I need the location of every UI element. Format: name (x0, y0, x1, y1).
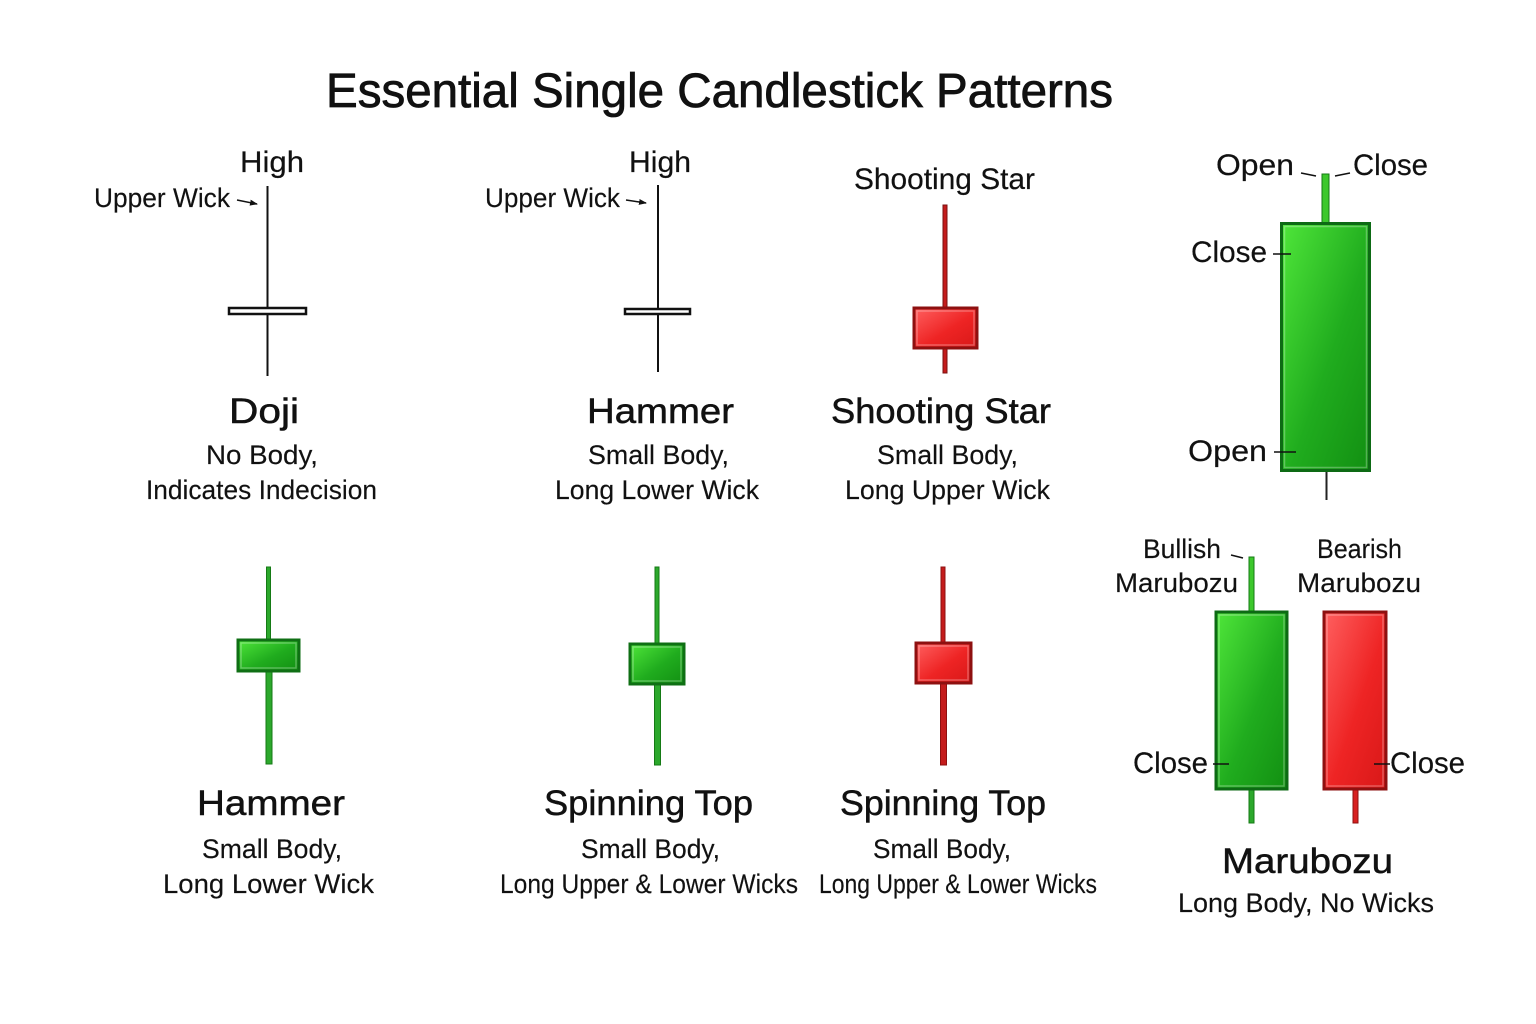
label: close left: Close (1133, 747, 1208, 780)
arrow: upper wick (626, 200, 646, 203)
icon: bearish marubozu candle (1324, 612, 1386, 823)
description: spinning top: Long Upper & Lower Wicks (500, 869, 798, 899)
arrow: upper wick (237, 200, 257, 204)
description: doji: No Body, (206, 440, 318, 470)
label: open top: Open (1216, 149, 1294, 182)
label: close right: Close (1390, 747, 1465, 780)
icon: green spinning top candle (630, 567, 684, 765)
label: bearish marubozu (1297, 534, 1421, 598)
heading: hammer: Hammer (587, 392, 734, 431)
heading: doji: Doji (229, 392, 299, 431)
icon: bullish marubozu candle (1216, 557, 1287, 823)
pointer: open side (1274, 451, 1296, 453)
description: shooting star: Small Body, (877, 440, 1018, 470)
heading: spinning top: Spinning Top (840, 784, 1046, 823)
description: hammer (555, 440, 759, 505)
description: shooting star (845, 440, 1050, 505)
label: shooting star: Shooting Star (854, 163, 1035, 196)
panel: spinning top green (500, 567, 798, 899)
description: doji: Indicates Indecision (146, 475, 377, 505)
pointer: bullish (1231, 555, 1243, 558)
icon: doji candle (229, 186, 306, 376)
panel: marubozu (1115, 534, 1465, 918)
label: bullish marubozu: Marubozu (1115, 568, 1238, 598)
description: hammer: Small Body, (202, 834, 342, 864)
description: hammer: Small Body, (588, 440, 729, 470)
pointer: close left (1213, 763, 1229, 765)
label: high: High (629, 146, 691, 179)
description: spinning top (819, 834, 1097, 899)
description: doji (146, 440, 377, 505)
description: spinning top: Small Body, (581, 834, 720, 864)
description: shooting star: Long Upper Wick (845, 475, 1050, 505)
label: upper wick: Upper Wick (485, 183, 620, 213)
pointer: close side (1273, 253, 1291, 255)
heading: shooting star: Shooting Star (831, 392, 1051, 431)
title: Essential Single Candlestick Patterns (326, 65, 1113, 118)
label: open side: Open (1188, 435, 1267, 468)
panel: hammer top (485, 146, 759, 505)
description: marubozu: Long Body, No Wicks (1178, 888, 1434, 918)
panel: hammer green (163, 567, 375, 899)
pointer: close right (1374, 763, 1390, 765)
icon: red spinning top candle (916, 567, 971, 765)
pointer: open top (1301, 173, 1316, 176)
heading: marubozu: Marubozu (1222, 842, 1393, 881)
panel: large bullish candle (1188, 149, 1428, 500)
icon: hammer candle (625, 185, 690, 372)
label: close side: Close (1191, 236, 1267, 269)
pointer: close top (1335, 173, 1350, 176)
description: hammer: Long Lower Wick (555, 475, 759, 505)
panel: shooting star (831, 163, 1051, 505)
icon: shooting star candle (914, 205, 977, 373)
icon: green hammer candle (238, 567, 299, 764)
description: spinning top: Small Body, (873, 834, 1011, 864)
heading: hammer: Hammer (197, 784, 345, 823)
label: bearish marubozu: Marubozu (1297, 568, 1421, 598)
label: high: High (240, 146, 304, 179)
label: bullish marubozu: Bullish (1143, 534, 1221, 564)
description: hammer (163, 834, 375, 899)
panel: spinning top red (819, 567, 1097, 899)
label: upper wick: Upper Wick (94, 183, 230, 213)
label: bearish marubozu: Bearish (1317, 534, 1402, 564)
icon: large green candle (1282, 174, 1370, 500)
description: spinning top (500, 834, 798, 899)
description: spinning top: Long Upper & Lower Wicks (819, 869, 1097, 899)
description: hammer: Long Lower Wick (163, 869, 375, 899)
panel: doji (94, 146, 377, 505)
label: bullish marubozu (1115, 534, 1238, 598)
heading: spinning top: Spinning Top (544, 784, 753, 823)
label: close top: Close (1353, 149, 1428, 182)
